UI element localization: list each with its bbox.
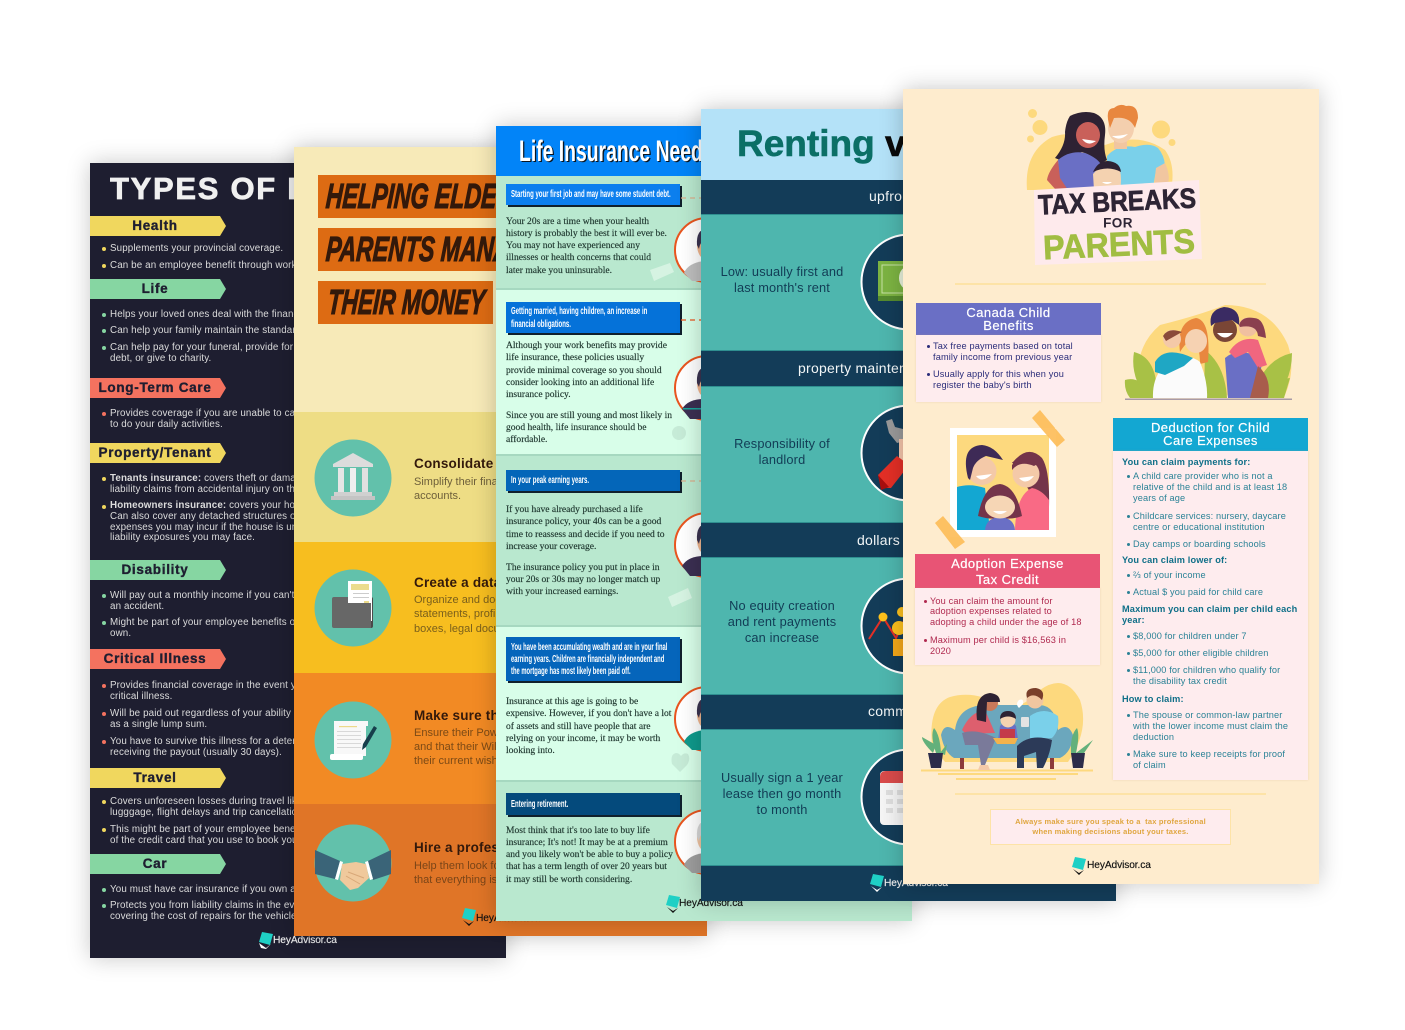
panel: life insurance needs <box>496 126 912 921</box>
panel: renting vs buying <box>701 109 1116 901</box>
text: hire a professional: Help them look for an advisor to ensure that everything is in place <box>414 860 606 886</box>
text: life bullet one: Helps your loved ones deal with the financial burden <box>110 308 343 320</box>
header: adoption expense tax credit <box>915 554 1100 588</box>
icon: coins and chart <box>860 578 903 674</box>
row: maintenance <box>701 386 1116 523</box>
banner: health <box>90 216 226 236</box>
text: still young: Since you are still young and most likely in good health, life insurance should be affordable. <box>506 410 672 445</box>
panel: helping elderly parents <box>294 147 707 936</box>
text: work benefits: Although your work benefits may provide life insurance, these policies usually provide minimal coverage so you should consider looking into an additional life insurance policy. <box>506 340 667 400</box>
row: dollars <box>701 557 1116 695</box>
illustration: family with kids and leaves <box>1124 305 1292 400</box>
icon: wrench and hand <box>860 405 903 502</box>
text: long-term care bullet: Provides coverage if you are unable to care for yourself to do your daily activities. <box>110 408 357 430</box>
text: maintenance renting: Responsibility of landlord <box>734 436 830 467</box>
text: provider: A child care provider who is not a relative of the child and is at least 18 years of age <box>1133 470 1287 502</box>
banner: disability <box>90 560 226 580</box>
text: car bullet one: You must have car insurance if you own a vehicle. <box>110 884 333 894</box>
footer band <box>701 866 1116 901</box>
illustration: family on couch <box>921 683 1093 780</box>
text: create a database: Organize and document bank statements, profiles, safety deposit boxes, legal documents <box>414 594 583 635</box>
heading: renting vs: Renting vs Buying <box>737 123 1062 164</box>
text: too late: Most think that it's too late to buy life insurance; It's not! It may be at a premium and you likely won't be able to buy a policy that has a term length of over 20 years but it may still be worth considering. <box>506 824 673 884</box>
heading: life insurance needs: Life Insurance Needs <box>519 135 714 168</box>
icon: document and pen <box>314 702 392 778</box>
title line two: PARENTS MANAGE <box>325 230 545 269</box>
logo text: HeyAdvisor.ca <box>679 898 743 908</box>
text: tenants insurance: Tenants insurance: covers theft or damage to your belongings liability claims from accidental injury on the property. <box>110 473 392 495</box>
text: travel bullet one: Covers unforeseen losses during travel like medical, lugggage, flight delays and trip cancellations. <box>110 796 343 818</box>
panel: deduction for child care expenses <box>1112 418 1308 780</box>
body box <box>916 335 1101 402</box>
illustration: family photo with tape <box>935 410 1065 549</box>
text: already purchased: If you have already purchased a life insurance policy, your 40s can be a good time to reassess and decide if you need to increase your coverage. <box>506 504 665 552</box>
banner: property tenant: Property/Tenant <box>98 445 212 460</box>
row header: dollars <box>701 523 1116 557</box>
header: deduction for child care <box>1113 418 1308 451</box>
row header: property maintenance: property maintenance <box>798 360 938 376</box>
banner: long-term care <box>90 378 226 398</box>
avatar: final earning <box>674 686 701 752</box>
label: first job: Starting your first job and may have some student debt. <box>511 189 671 200</box>
banner: critical illness <box>90 649 226 669</box>
avatar: retirement <box>674 810 701 874</box>
subheading: lower of: You can claim lower of: <box>1122 554 1227 564</box>
illustration: hero family with title card <box>1026 104 1202 267</box>
text: two thirds: ⅔ of your income <box>1133 570 1206 580</box>
hero family figures <box>1027 105 1176 190</box>
logo icon <box>666 895 680 913</box>
panel: types of insurance <box>90 163 506 958</box>
header band <box>496 126 912 176</box>
text: tax free payments: Tax free payments based on total family income from previous year <box>933 341 1073 362</box>
logo icon <box>870 874 884 892</box>
text: critical illness bullet three: You have to survive this illness for a determined period before receiving the payout (usually 30 days). <box>110 736 385 758</box>
divider bottom <box>955 792 1266 794</box>
label: getting married: Getting married, having children, an increase in financial obligations. <box>511 306 647 330</box>
icon: folder <box>314 570 392 646</box>
title: parents: PARENTS <box>1042 223 1196 267</box>
text: actual: Actual $ you paid for child care <box>1133 586 1263 596</box>
text: health bullet one: Supplements your provincial coverage. <box>110 242 283 254</box>
heading: hire a professional: Hire a professional <box>414 840 539 855</box>
banner: long-term care: Long-Term Care <box>98 380 212 395</box>
banner: travel <box>90 768 226 789</box>
row header: upfront <box>701 180 1116 214</box>
text: travel bullet two: This might be part of your employee benefits or a perk of the credit card that you use to book your trip. <box>110 824 351 846</box>
heading: consolidate: Consolidate their accounts <box>414 456 592 471</box>
body box <box>915 588 1100 665</box>
header: deduction for child care: Deduction for Child Care Expenses <box>1151 420 1270 448</box>
title: tax breaks: TAX BREAKS <box>1037 182 1197 221</box>
watermark icons <box>650 263 692 772</box>
banner: travel: Travel <box>133 770 177 785</box>
avatar: twenties <box>674 218 701 282</box>
row header: dollars: dollars spent <box>857 532 940 548</box>
text: apply: Usually apply for this when you register the baby's birth <box>933 369 1064 390</box>
section: make sure <box>294 673 707 804</box>
banner: critical illness: Critical Illness <box>104 651 206 666</box>
title bar one <box>318 175 707 218</box>
logo text: HeyAdvisor.ca <box>1087 860 1151 871</box>
label: entering retirement: Entering retirement. <box>511 799 568 810</box>
row header: commitment: commitment <box>868 703 947 719</box>
connector dashes <box>681 197 701 482</box>
text: commitment renting: Usually sign a 1 year lease then go month to month <box>721 770 843 817</box>
banner: health: Health <box>132 218 178 233</box>
title bar three <box>318 281 493 324</box>
text: homeowners insurance: Homeowners insurance: covers your home and belongings. Can also cover any detached structures on the property expenses you may incur if the house is uninhabitable and liability exposures you may face. <box>110 500 383 543</box>
label: accumulating wealth: You have been accumulating wealth and are in your final earning years. Children are financially independent and the mortgage has most likely been paid off. <box>511 642 667 677</box>
banner: car: Car <box>143 856 167 871</box>
label: peak earning <box>506 470 680 491</box>
section: alternate band four <box>496 625 912 782</box>
text: critical illness bullet one: Provides financial coverage in the event you develop a critical illness. <box>110 680 353 702</box>
body box <box>1113 451 1308 780</box>
panel: tax breaks for parents <box>903 89 1319 884</box>
subheading: how to claim: How to claim: <box>1122 694 1184 704</box>
row: upfront <box>701 214 1116 351</box>
row header: property maintenance <box>701 351 1116 386</box>
text: disability bullet one: Will pay out a monthly income if you can't work due to an accident. <box>110 590 349 612</box>
row header: commitment <box>701 695 1116 729</box>
text: claim amount: You can claim the amount for adoption expenses related to adopting a child under the age of 18 <box>930 596 1082 627</box>
text: consolidate: Simplify their finances by consolidating accounts. <box>414 476 603 502</box>
text: childcare services: Childcare services: nursery, daycare centre or educational institution <box>1133 510 1286 532</box>
row header: upfront: upfront costs <box>869 188 952 204</box>
text: policy in place: The insurance policy you put in place in your 20s or 30s may no longer match up with your increased earnings. <box>506 562 660 597</box>
subheading: maximum: Maximum you can claim per child each year: <box>1122 604 1297 624</box>
header: canada child benefits <box>916 303 1101 335</box>
avatar: married <box>674 356 701 420</box>
title: for: FOR <box>1103 216 1133 230</box>
text: day camps: Day camps or boarding schools <box>1133 538 1266 548</box>
avatar: peak earning <box>674 512 701 578</box>
subheading: you can claim payments: You can claim payments for: <box>1122 456 1250 466</box>
section: alternate band two <box>496 288 912 456</box>
section: create a database <box>294 542 707 673</box>
divider top <box>955 282 1266 284</box>
label: peak earning: In your peak earning years. <box>511 475 589 486</box>
text: 5000: $5,000 for other eligible children <box>1133 648 1269 658</box>
title line one: HELPING ELDERLY <box>325 177 543 216</box>
label: first job <box>506 184 680 205</box>
banner: car <box>90 854 226 875</box>
heading: types of insurance: TYPES OF INSURANCE <box>110 171 487 206</box>
logo text: HeyAdvisor.ca <box>884 878 948 889</box>
text: your 20s: Your 20s are a time when your health history is probably the best it will ever be. You may not have experienced any illnesses or health concerns that could later make you uninsurable. <box>506 216 667 276</box>
text: 11000: $11,000 for children who qualify for the disability tax credit <box>1133 664 1280 686</box>
text: receipts: Make sure to keep receipts for proof of claim <box>1133 748 1285 770</box>
banner: life <box>90 279 226 299</box>
text: make sure: Ensure their Power of Attorney and that their Will are up to date and reflect their current wishes <box>414 726 624 767</box>
text: insurance at this age: Insurance at this age is going to be expensive. However, if you don't have a lot of assets and still have people that are relying on your income, it may be worth looking into. <box>506 696 671 756</box>
section: consolidate <box>294 412 707 542</box>
section: hire a professional <box>294 804 707 936</box>
text: maximum per child: Maximum per child is $16,563 in 2020 <box>930 635 1066 656</box>
logo icon <box>259 932 273 949</box>
text: 8000: $8,000 for children under 7 <box>1133 630 1247 640</box>
text: dollars renting: No equity creation and rent payments can increase <box>728 598 836 645</box>
text: spouse: The spouse or common-law partner with the lower income must claim the deduction <box>1133 710 1288 742</box>
icon: handshake <box>314 824 392 902</box>
heading: make sure: Make sure their documents <box>414 708 594 723</box>
banner: life: Life <box>142 281 168 296</box>
header: adoption expense tax credit: Adoption Expense Tax Credit <box>951 556 1064 587</box>
title bar two <box>318 228 707 271</box>
text: life bullet two: Can help your family maintain the standard of living <box>110 325 338 336</box>
callout: speak to tax professional <box>990 809 1231 845</box>
logo text: HeyAdvisor.ca <box>273 934 337 946</box>
icon: calendar <box>860 749 903 846</box>
banner: property tenant <box>90 443 226 463</box>
text: health bullet two: Can be an employee benefit through work or purchased <box>110 260 358 270</box>
text: car bullet two: Protects you from liability claims in the event of an accident, covering the cost of repairs for the vehicle. <box>110 900 377 922</box>
logo icon <box>1072 857 1086 875</box>
logo text: HeyAdvisor.ca <box>476 913 540 924</box>
banner: disability: Disability <box>121 562 189 577</box>
icon: cash <box>860 234 903 330</box>
title line three: THEIR MONEY <box>327 283 486 322</box>
text: life bullet three: Can help pay for your funeral, provide for your family, pay off debt, or give to charity. <box>110 342 380 364</box>
text: upfront renting: Low: usually first and last month's rent <box>721 264 843 295</box>
label: getting married <box>506 302 680 333</box>
panel: canada child benefits <box>916 303 1102 402</box>
row: commitment <box>701 729 1116 866</box>
panel: adoption expense tax credit <box>914 554 1100 666</box>
label: entering retirement <box>506 793 680 815</box>
title card <box>1034 180 1202 265</box>
logo icon <box>462 908 476 926</box>
text: critical illness bullet two: Will be paid out regardless of your ability to work as a single lump sum. <box>110 708 326 730</box>
text: disability bullet two: Might be part of your employee benefits or you can buy your own. <box>110 617 378 639</box>
icon: bank <box>314 440 392 516</box>
heading: create a database: Create a database <box>414 575 533 590</box>
callout: speak to tax professional: Always make sure you speak to a tax professional when making decisions about your taxes. <box>1015 817 1206 836</box>
header: canada child benefits: Canada Child Benefits <box>966 305 1051 332</box>
